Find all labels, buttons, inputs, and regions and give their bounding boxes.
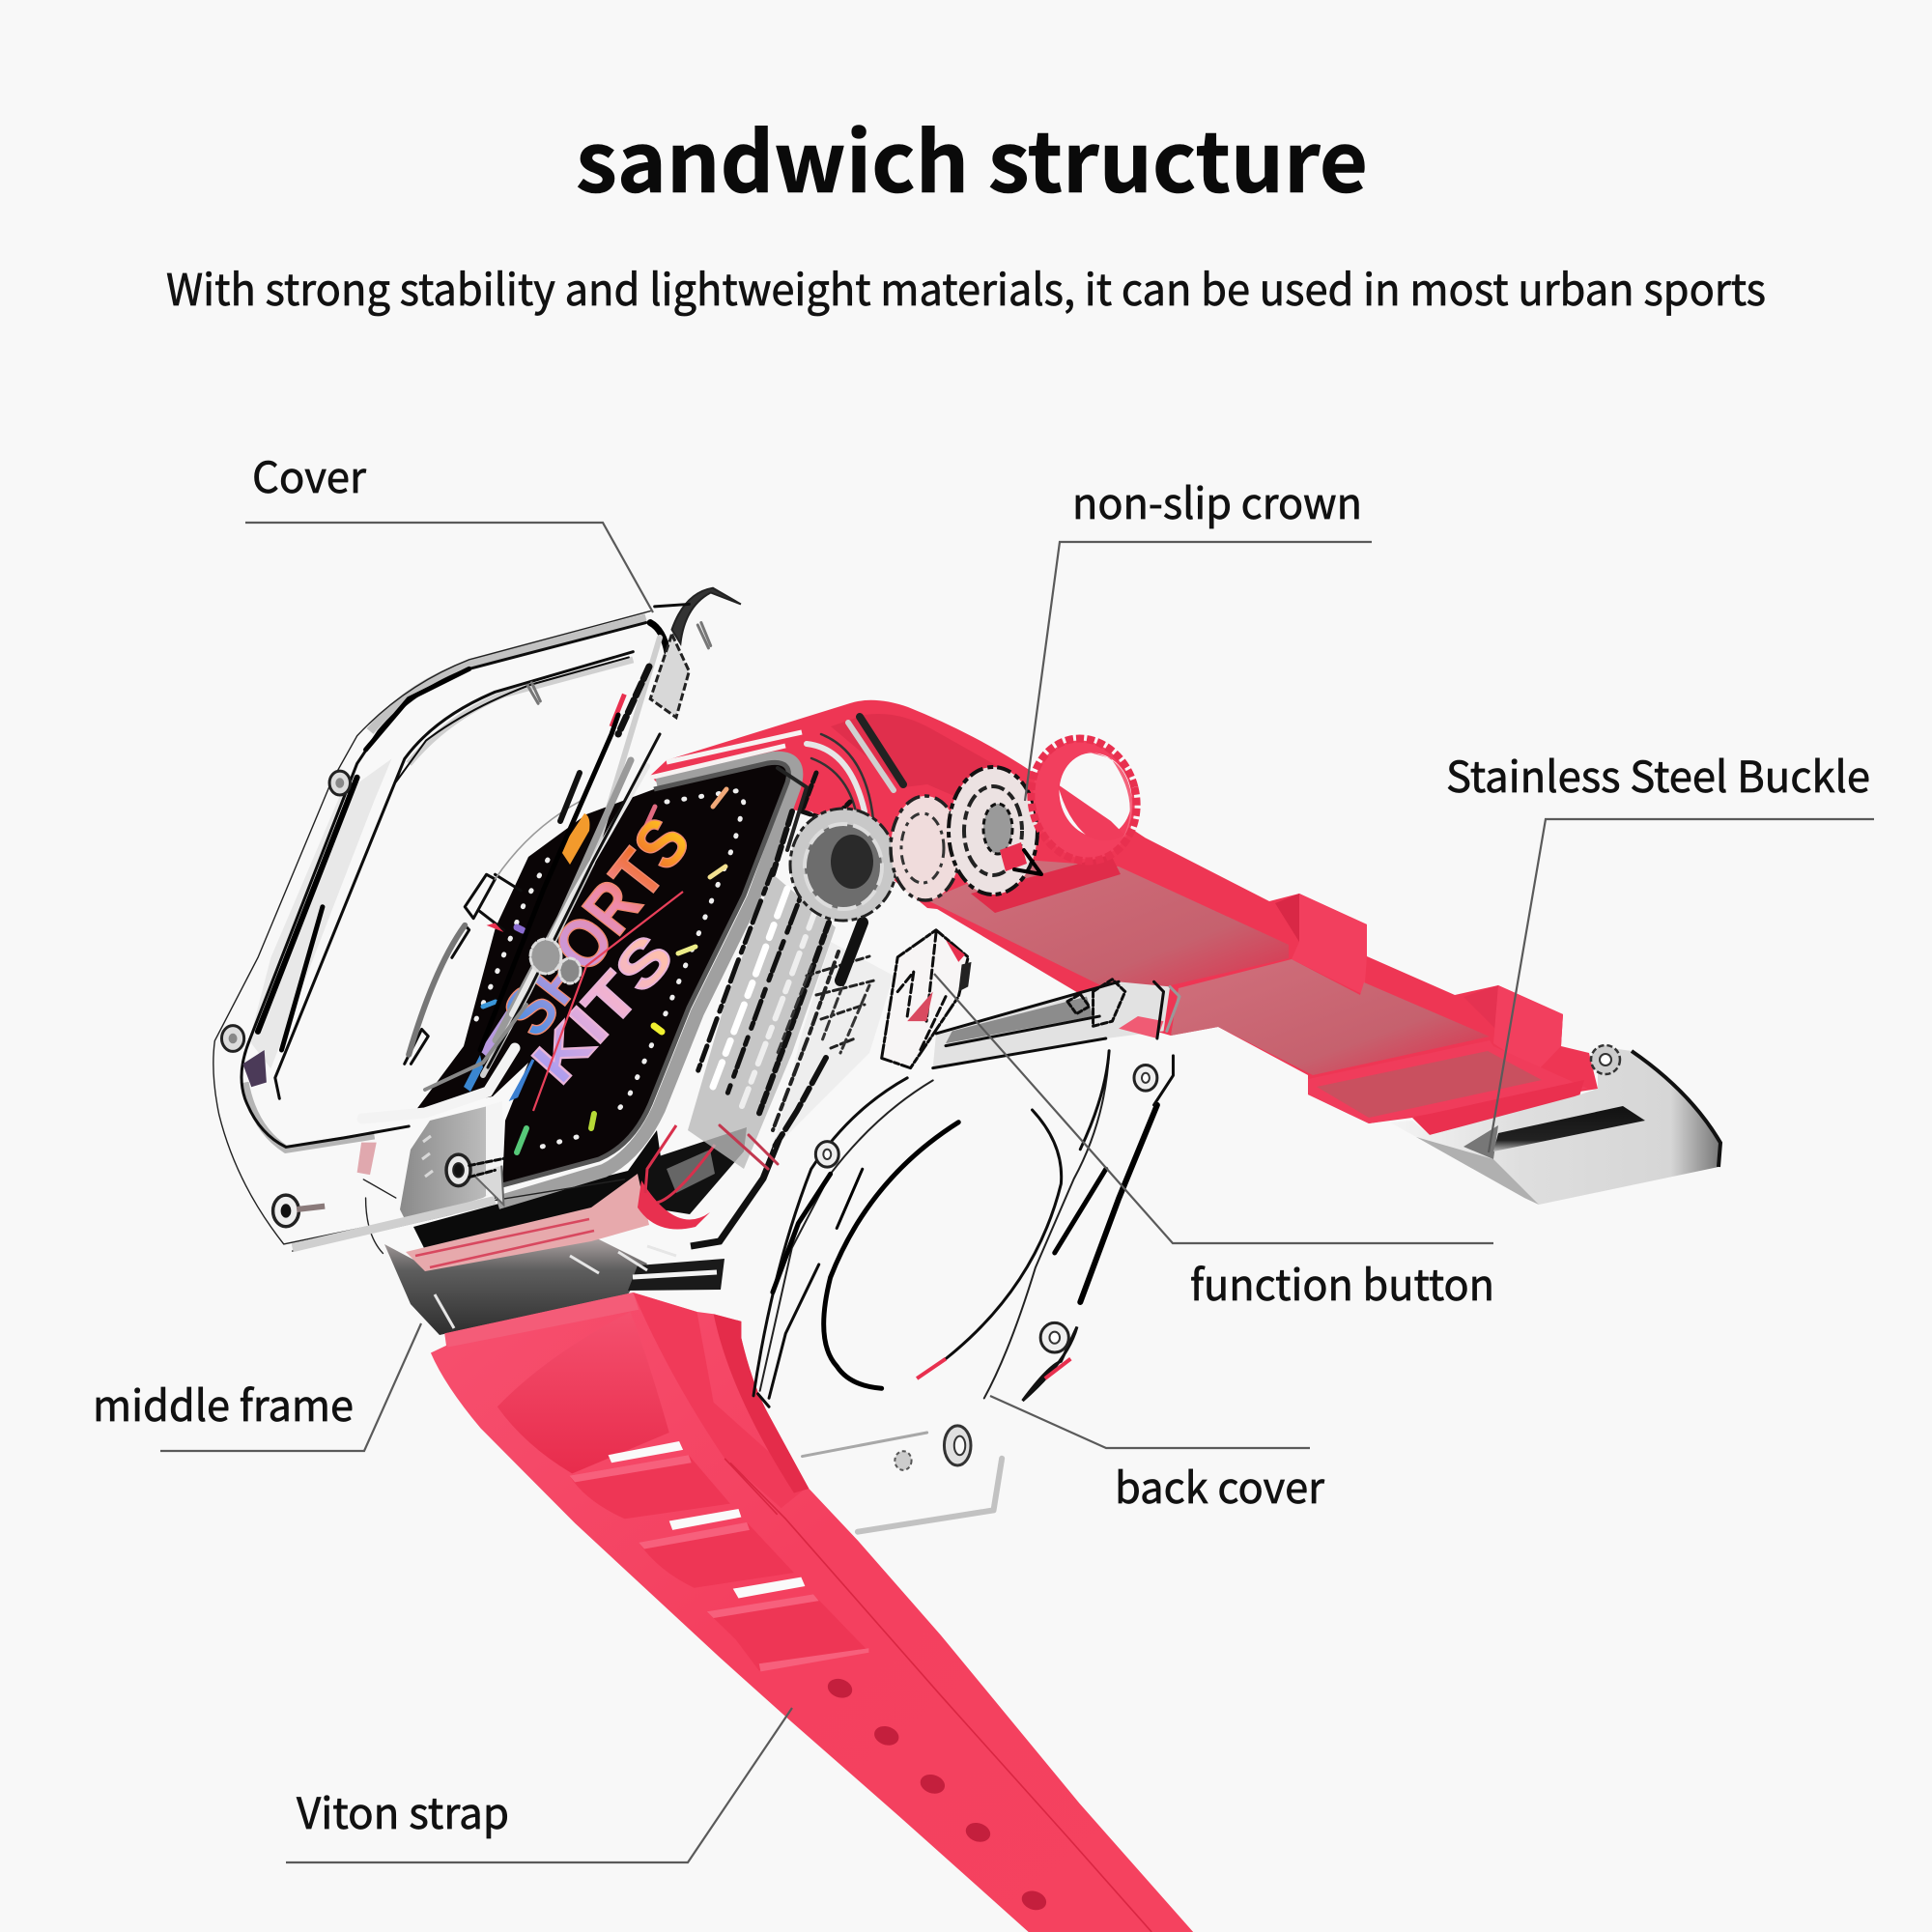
strap block one inner bbox=[1275, 894, 1299, 942]
left face colours bbox=[480, 1009, 512, 1058]
frame screws bbox=[221, 771, 503, 1227]
plate screws bbox=[895, 1426, 971, 1470]
lower tab bbox=[628, 1259, 724, 1291]
buckle body bbox=[1390, 1046, 1720, 1205]
case column texture bbox=[697, 869, 874, 1169]
blue wedge bbox=[512, 1060, 533, 1098]
callout: middle frame: middle frame bbox=[93, 1372, 354, 1434]
tube lines bbox=[933, 980, 1179, 1068]
frame lower tint bbox=[357, 1143, 377, 1175]
screen grey edge bbox=[502, 762, 788, 1185]
strap block two bbox=[1493, 985, 1563, 1072]
cover side bar over screen bbox=[362, 638, 660, 1119]
function button and tube bbox=[882, 930, 1179, 1068]
plate dashes bbox=[422, 1136, 433, 1177]
back cover screws bbox=[815, 1065, 1157, 1352]
callout: function button: function button bbox=[1190, 1251, 1494, 1313]
ring teeth bbox=[1018, 727, 1150, 872]
strap base silhouette bbox=[927, 773, 1598, 1123]
ring hole bbox=[1050, 745, 1141, 845]
dark wedge under plate bbox=[413, 1130, 667, 1250]
top cluster bbox=[650, 635, 689, 718]
strap block two inner bbox=[1463, 985, 1498, 1029]
callout: Cover bbox=[245, 443, 653, 612]
strap silhouette bbox=[431, 1293, 1193, 1932]
chamber red rim bbox=[638, 1180, 710, 1229]
buckle slot bbox=[1493, 1106, 1645, 1151]
callout: middle frame bbox=[93, 1323, 421, 1451]
crown pocket bbox=[971, 855, 1121, 913]
title: sandwich structure bbox=[576, 96, 1368, 216]
back cover bbox=[753, 1051, 1173, 1401]
callout: back cover bbox=[990, 1396, 1325, 1516]
white strip by screen bbox=[486, 1101, 504, 1196]
strap underside panel one bbox=[927, 860, 1289, 1000]
strap tab behind case bbox=[650, 700, 1145, 927]
back cover lower plate bbox=[758, 1264, 1002, 1532]
callout: non-slip crown: non-slip crown bbox=[1072, 469, 1362, 531]
back cover ring bbox=[824, 1110, 1062, 1388]
case top detail bbox=[773, 717, 903, 874]
case right pale fill bbox=[773, 942, 894, 1150]
pink band bbox=[406, 1174, 649, 1271]
frame corner tint bbox=[242, 1050, 267, 1087]
watch lower body bbox=[384, 1101, 794, 1335]
strap block one bbox=[1292, 894, 1367, 995]
frame centre screw bbox=[530, 939, 581, 983]
watch face bbox=[415, 758, 796, 1203]
tube highlight fills bbox=[933, 981, 1170, 1068]
strap top highlight bbox=[444, 1293, 639, 1348]
back cover body bbox=[753, 1051, 1109, 1398]
transparent case bbox=[688, 717, 903, 1169]
strap seam bbox=[730, 1463, 1151, 1932]
frame pale left bar bbox=[249, 759, 391, 1068]
callout: Stainless Steel Buckle bbox=[1446, 743, 1874, 1152]
callout: non-slip crown bbox=[1025, 469, 1372, 801]
dial dots left bbox=[476, 860, 548, 1019]
frame grey companion strokes bbox=[370, 618, 646, 731]
frame top curl bbox=[672, 588, 741, 643]
callout: function button bbox=[934, 974, 1494, 1313]
crown stack bbox=[790, 767, 1041, 921]
strap lug pads bbox=[569, 1455, 730, 1519]
strap slots bbox=[609, 1441, 805, 1598]
buckle edge bbox=[1632, 1051, 1720, 1167]
strap holes bbox=[823, 1675, 1051, 1914]
strap recessed panel bbox=[497, 1312, 669, 1473]
screen bbox=[415, 762, 788, 1185]
coloured ticks bbox=[483, 789, 726, 1152]
case button dial bbox=[790, 809, 896, 921]
crown parts bbox=[891, 767, 1041, 900]
callout: Stainless Steel Buckle: Stainless Steel Buckle bbox=[1446, 743, 1870, 805]
orange top glyph bbox=[560, 813, 589, 865]
callout: Viton strap: Viton strap bbox=[297, 1779, 509, 1841]
case column fill bbox=[688, 874, 836, 1169]
front cover frame bbox=[213, 588, 741, 1253]
screen outer metal bbox=[497, 758, 796, 1203]
callout: back cover: back cover bbox=[1115, 1454, 1325, 1516]
grey plate bbox=[400, 1106, 507, 1221]
crown ring bbox=[1018, 727, 1150, 872]
subtitle: With strong stability and lightweight materials, it can be used in most urban sports bbox=[166, 255, 1766, 318]
frame faint outer edge bbox=[213, 611, 650, 1253]
callout: Cover: Cover bbox=[252, 443, 367, 505]
frame lower bar bbox=[293, 1200, 495, 1248]
strap through hole bbox=[1058, 784, 1124, 840]
lower arm bbox=[691, 1101, 794, 1246]
dial dots bbox=[531, 790, 744, 1150]
red stripes above screen bbox=[650, 732, 802, 778]
watch face text: SPORTS bbox=[489, 804, 705, 1051]
lower strap bbox=[431, 1293, 1193, 1932]
chamber bbox=[647, 1127, 747, 1214]
grey lower body bbox=[384, 1235, 647, 1335]
buckle bbox=[1390, 1045, 1720, 1205]
strap side ridge bbox=[633, 1293, 808, 1508]
ring body bbox=[1021, 729, 1147, 870]
back cover right rib bbox=[1023, 1056, 1173, 1401]
frame heavy outlines bbox=[242, 623, 646, 1147]
strap retaining strip bbox=[1412, 1080, 1584, 1135]
callout: Viton strap bbox=[286, 1708, 792, 1862]
button shape bbox=[882, 930, 968, 1068]
strap underside panel two bbox=[1171, 959, 1490, 1075]
buckle screw bbox=[1591, 1045, 1620, 1074]
strap lower rim bbox=[1308, 1040, 1588, 1123]
seconds hand bbox=[533, 892, 683, 1111]
watch face text: KITS bbox=[519, 921, 687, 1096]
strap rim panel bbox=[1317, 1051, 1542, 1118]
upper strap: red band bbox=[650, 700, 1598, 1135]
buckle facets bbox=[1416, 1137, 1539, 1205]
watch lugs on frame bbox=[405, 801, 582, 1064]
